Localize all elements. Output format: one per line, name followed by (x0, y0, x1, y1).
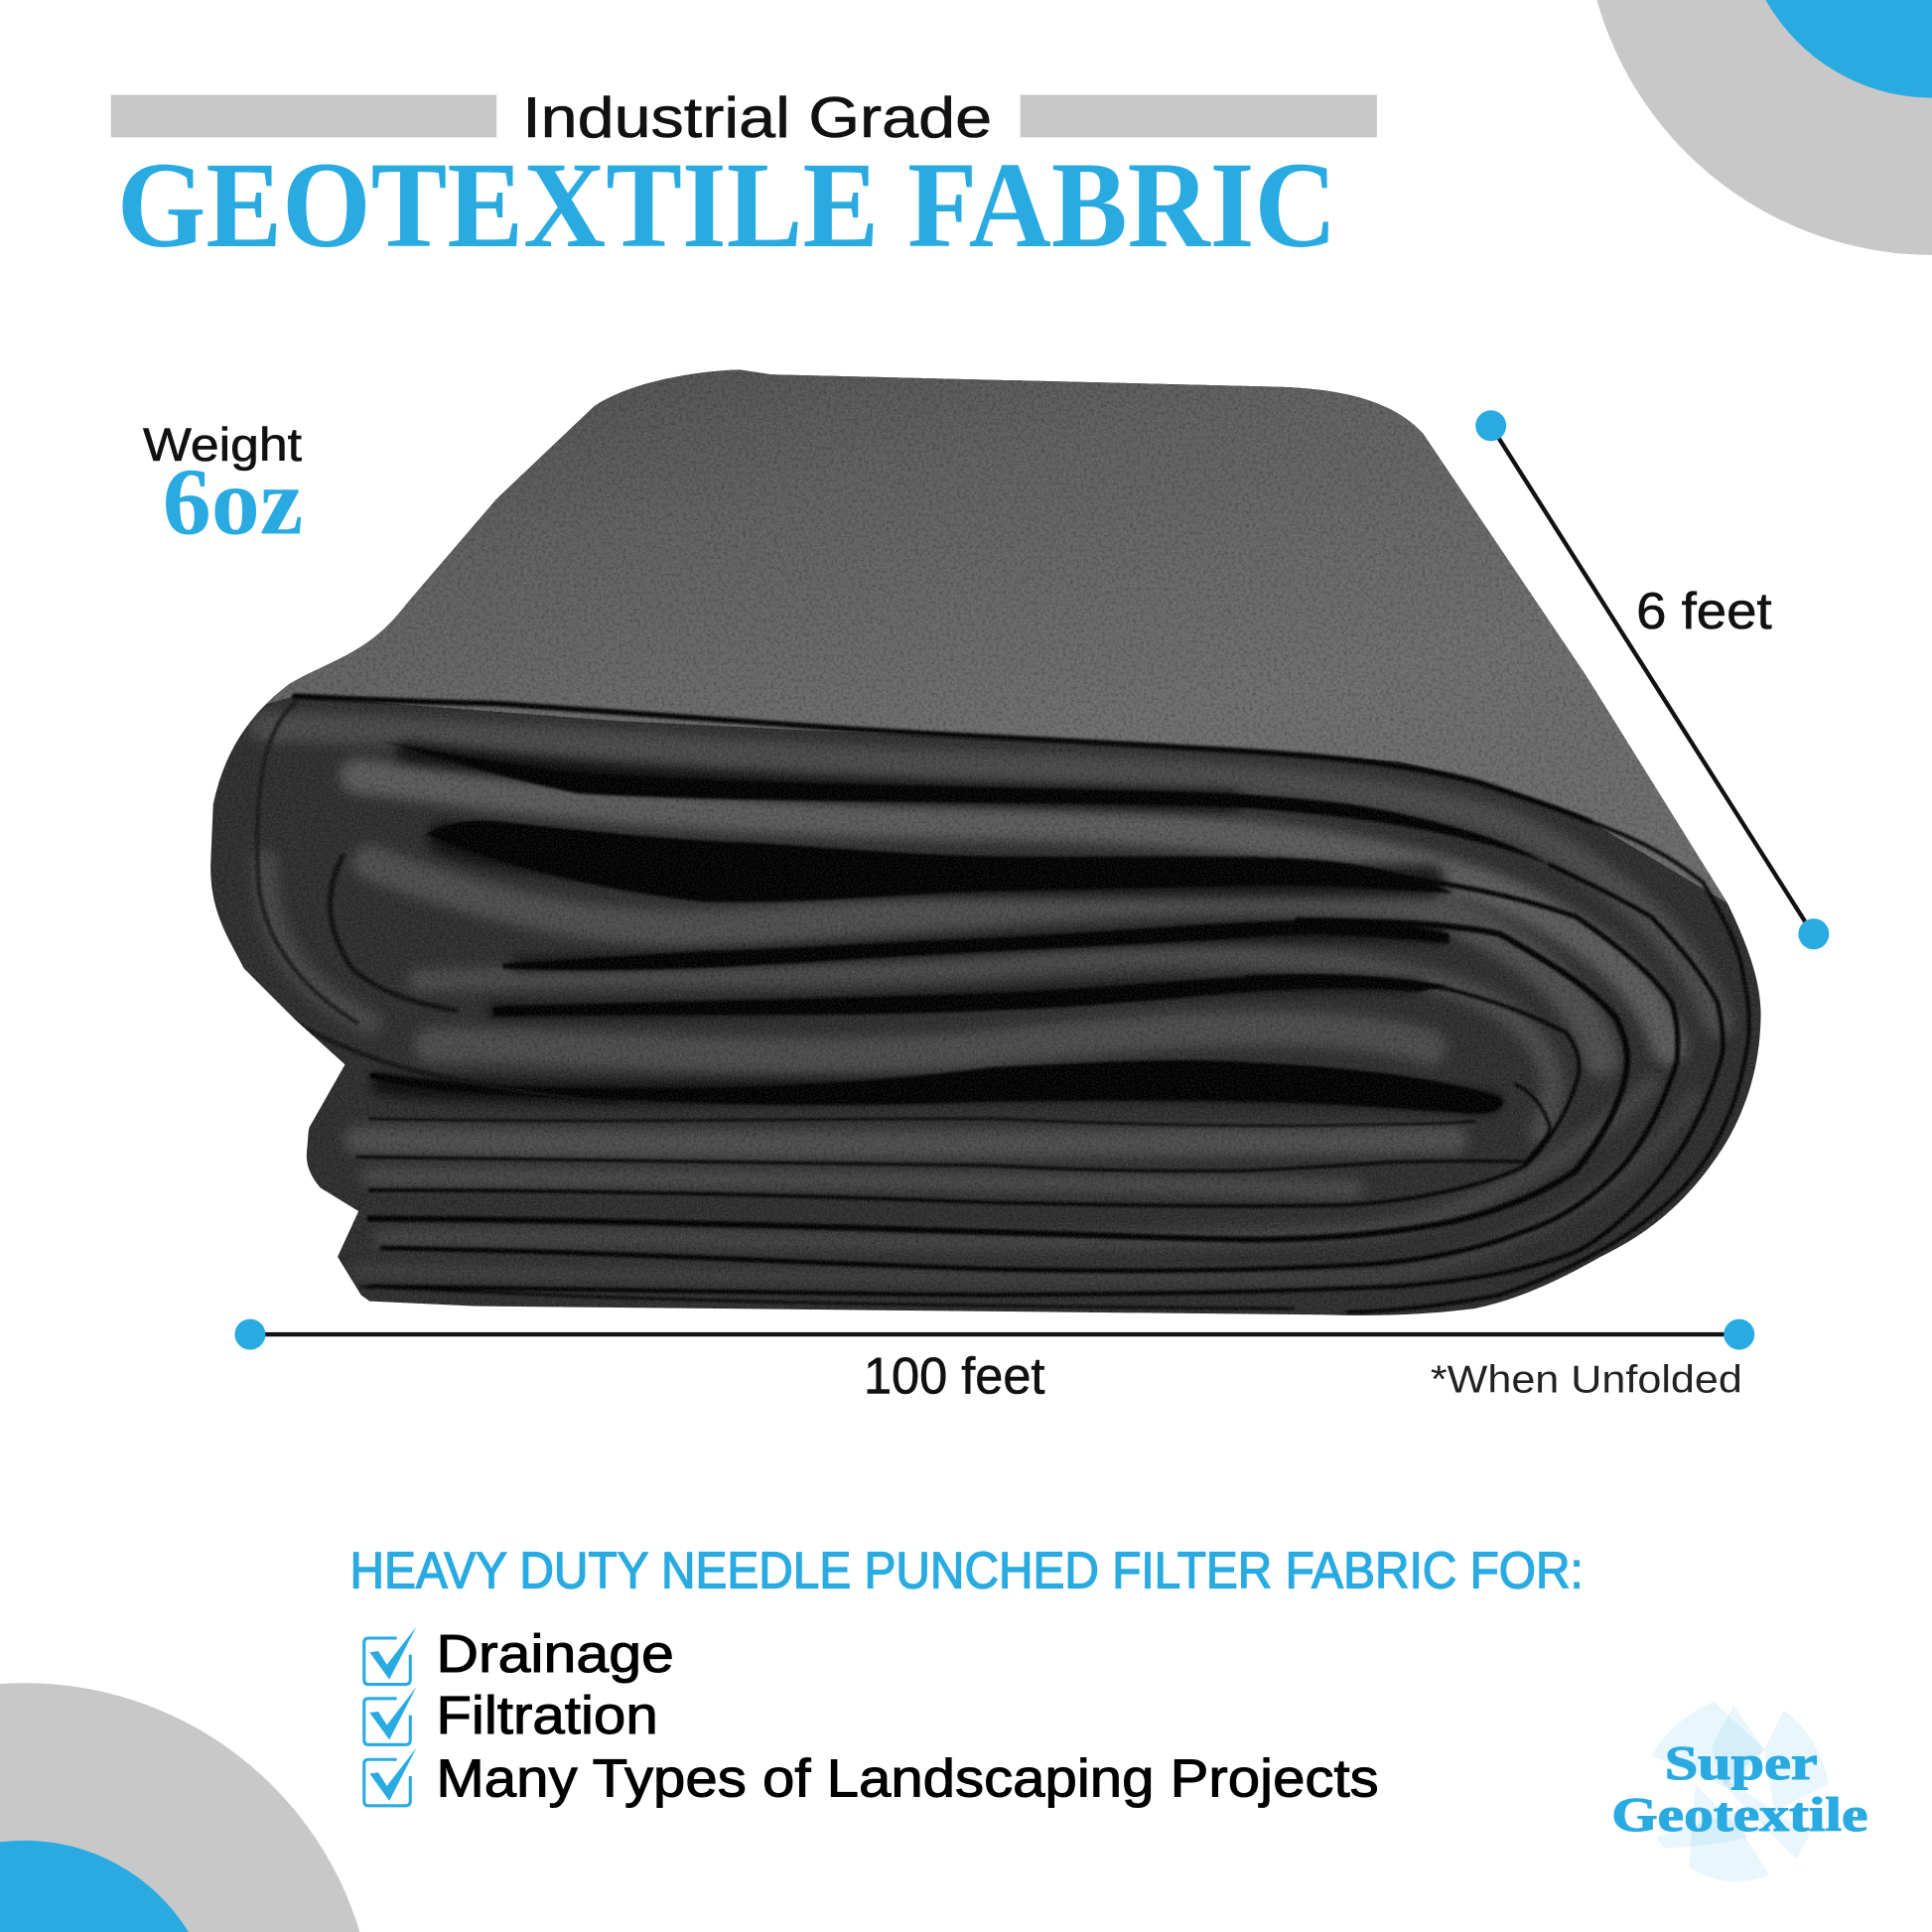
felt texture: dark mottling (185, 357, 1787, 1330)
checklist (364, 1625, 1379, 1808)
fabric highlight bands (265, 727, 1719, 1278)
weight label: Weight (143, 418, 302, 471)
logo text: Geotextile: Geotextile (1611, 1789, 1867, 1842)
item: Many Types of Landscaping Projects (364, 1747, 1379, 1808)
dimension label: 6 feet (1636, 583, 1772, 640)
label: Many Types of Landscaping Projects (436, 1749, 1379, 1808)
endpoint dot: left (234, 1319, 265, 1350)
fabric base (185, 357, 1787, 1330)
dimension: 6 feet (1475, 410, 1829, 949)
endpoint dot: top (1475, 410, 1506, 441)
top panel of the roll (266, 369, 1727, 903)
endpoint dot: right (1724, 1319, 1754, 1350)
heading rule: left (111, 95, 496, 137)
endpoint dot: bottom (1798, 918, 1829, 949)
heading rule: right (1021, 95, 1377, 137)
deep shadow folds (369, 740, 1550, 1114)
label: Drainage (436, 1625, 674, 1684)
folded black geotextile fabric (185, 357, 1787, 1330)
dimension: 100 feet (234, 1319, 1754, 1406)
fold edge lines (257, 696, 1749, 1312)
logo watermark fan (1651, 1702, 1829, 1881)
dimension label: 100 feet (864, 1348, 1045, 1406)
icon: checkbox (364, 1687, 416, 1744)
dimension line (250, 1332, 1738, 1336)
footnote: *When Unfolded (1431, 1358, 1742, 1401)
section heading: HEAVY DUTY NEEDLE PUNCHED FILTER FABRIC FOR: (349, 1543, 1584, 1600)
corner decoration: top right (1596, 0, 1932, 255)
felt texture: fine grain (185, 357, 1787, 1330)
subtitle: Industrial Grade: Industrial Grade (522, 86, 992, 150)
logo text: Super: Super (1665, 1737, 1818, 1790)
label: Filtration (436, 1687, 658, 1745)
item: Filtration (364, 1687, 658, 1745)
soft shadows around folds (382, 752, 1491, 1103)
item: Drainage (364, 1625, 674, 1685)
title: Geotextile Fabric: GEOTEXTILE FABRIC (117, 136, 1337, 273)
corner decoration: bottom left (0, 1683, 359, 1932)
title block (111, 86, 1377, 273)
weight callout (143, 418, 303, 554)
logo: Super Geotextile (1611, 1702, 1867, 1881)
weight value: 6oz (163, 448, 303, 554)
icon: checkbox (364, 1747, 416, 1806)
dimension line (1498, 438, 1805, 921)
icon: checkbox (364, 1626, 416, 1685)
